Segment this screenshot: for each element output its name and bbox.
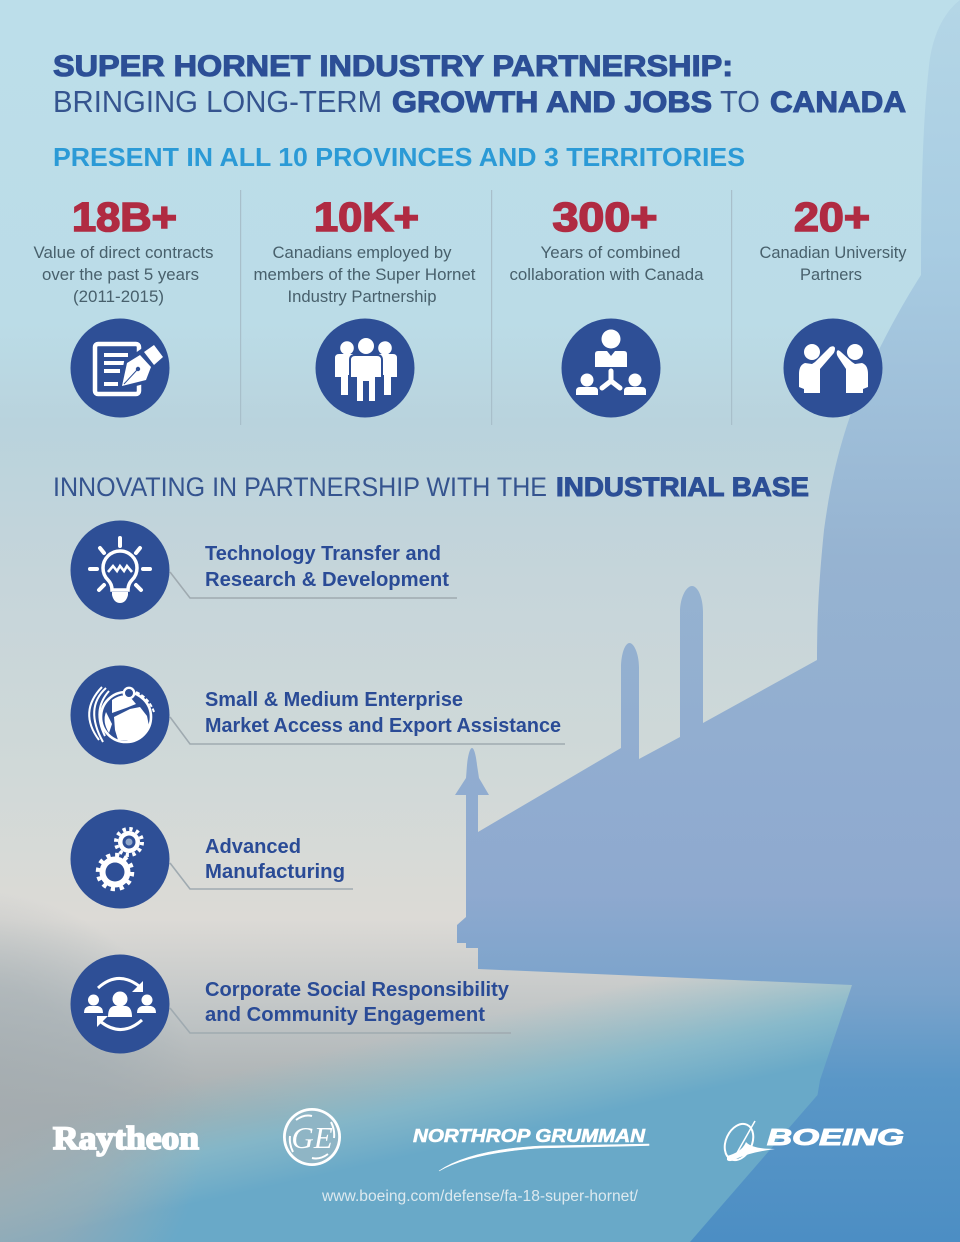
icon: team hierarchy bbox=[562, 318, 660, 418]
stat: 20+ bbox=[760, 194, 907, 418]
stat: 300+: 300+ bbox=[552, 194, 658, 240]
item: advanced manufacturing bbox=[70, 810, 353, 908]
stat: 300+: collaboration with Canada bbox=[510, 265, 704, 284]
stat: 18B+: over the past 5 years bbox=[42, 265, 199, 284]
item: corporate social responsibility bbox=[70, 954, 511, 1054]
label: Market Access and Export Assistance bbox=[205, 714, 561, 737]
logo: GE bbox=[283, 1108, 341, 1166]
label: and Community Engagement bbox=[205, 1003, 485, 1026]
logo: Boeing: BOEING bbox=[767, 1124, 904, 1150]
label bbox=[205, 688, 561, 737]
label bbox=[205, 835, 345, 883]
logo: GE: GE bbox=[291, 1120, 333, 1155]
icon: three people bbox=[316, 318, 414, 418]
label: Manufacturing bbox=[205, 860, 345, 883]
section heading: INDUSTRIAL BASE bbox=[556, 472, 809, 502]
stat: 20+: Partners bbox=[800, 265, 862, 284]
label bbox=[205, 978, 510, 1026]
item: market access bbox=[70, 666, 565, 764]
stat: 300+: Years of combined bbox=[540, 243, 680, 262]
aircraft silhouette bbox=[455, 0, 960, 1242]
section heading bbox=[53, 472, 809, 502]
label: Small & Medium Enterprise bbox=[205, 688, 463, 711]
label: Corporate Social Responsibility bbox=[205, 978, 510, 1001]
icon: Boeing symbol bbox=[719, 1119, 775, 1165]
logo: Boeing bbox=[719, 1119, 904, 1165]
divider bbox=[731, 190, 732, 425]
stat: 18B+: (2011-2015) bbox=[73, 287, 164, 306]
icon: globe with pin bbox=[70, 666, 170, 764]
title: CANADA bbox=[770, 86, 906, 119]
icon: light bulb bbox=[70, 520, 170, 620]
subtitle: PRESENT IN ALL 10 PROVINCES AND 3 TERRITORIES bbox=[53, 142, 745, 172]
stat: 18B+: 18B+ bbox=[72, 194, 177, 240]
stat: 10K+: 10K+ bbox=[314, 194, 419, 240]
stat: 10K+: members of the Super Hornet bbox=[254, 265, 476, 284]
stat: 300+ bbox=[510, 194, 704, 418]
logo: Raytheon: Raytheon bbox=[53, 1121, 199, 1157]
icon: high five bbox=[784, 318, 882, 418]
section heading: INNOVATING IN PARTNERSHIP WITH THE bbox=[53, 472, 547, 502]
title: TO bbox=[720, 85, 760, 119]
icon: gears bbox=[70, 810, 170, 908]
item: technology transfer bbox=[70, 520, 457, 620]
stat: 18B+ bbox=[34, 194, 214, 418]
website url: www.boeing.com/defense/fa-18-super-hornet/ bbox=[321, 1188, 639, 1205]
label: Research & Development bbox=[205, 568, 449, 591]
logo: Northrop Grumman: NORTHROP GRUMMAN bbox=[413, 1126, 646, 1146]
title: GROWTH AND JOBS bbox=[392, 86, 712, 119]
stat: 10K+: Canadians employed by bbox=[272, 243, 452, 262]
label bbox=[205, 542, 449, 591]
icon: document and pen bbox=[70, 318, 170, 418]
title bbox=[53, 50, 906, 119]
title: SUPER HORNET INDUSTRY PARTNERSHIP: bbox=[53, 50, 733, 83]
divider bbox=[240, 190, 241, 425]
stat: 10K+ bbox=[254, 194, 476, 418]
stat: 20+: Canadian University bbox=[760, 243, 907, 262]
logo: Northrop Grumman bbox=[413, 1126, 649, 1171]
label: Advanced bbox=[205, 835, 301, 858]
icon: community cycle bbox=[70, 954, 170, 1054]
label: Technology Transfer and bbox=[205, 542, 441, 565]
title: BRINGING LONG-TERM bbox=[53, 85, 382, 119]
stat: 10K+: Industry Partnership bbox=[288, 287, 436, 306]
stat: 18B+: Value of direct contracts bbox=[34, 243, 214, 262]
stat: 20+: 20+ bbox=[794, 194, 870, 240]
divider bbox=[491, 190, 492, 425]
